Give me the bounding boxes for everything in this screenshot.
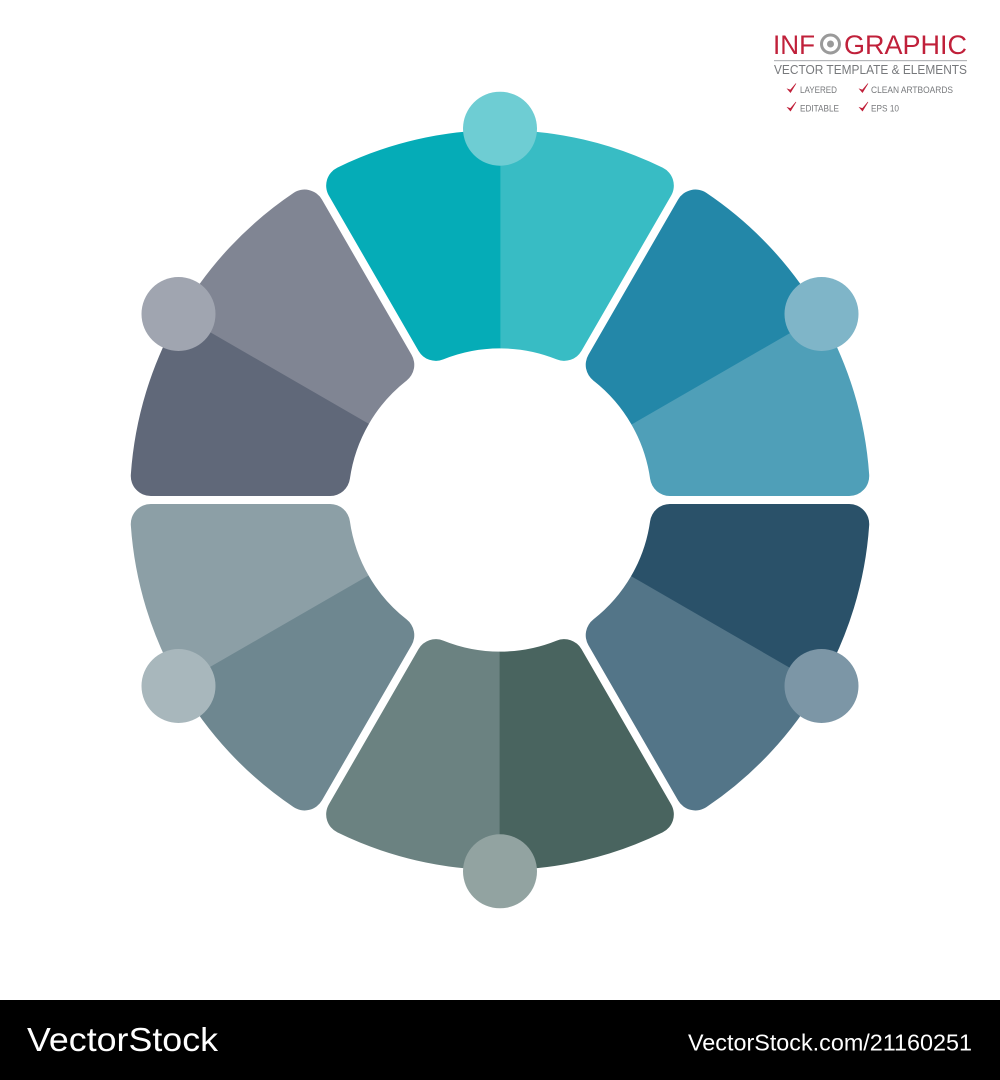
logo subtitle: VECTOR TEMPLATE & ELEMENTS	[774, 62, 967, 77]
node: bottom circle	[463, 834, 537, 908]
check: layered	[788, 84, 837, 96]
node: upper left circle	[142, 277, 216, 351]
check: eps 10: EPS 10	[871, 104, 899, 114]
node: upper right circle	[784, 277, 858, 351]
node: top circle	[463, 92, 537, 166]
checklist	[788, 84, 953, 114]
segment: lower left	[93, 419, 466, 836]
check: eps 10	[860, 102, 899, 114]
logo title	[773, 30, 967, 60]
segment: lower right	[534, 419, 907, 836]
node: lower right circle	[784, 649, 858, 723]
footer bar	[0, 1000, 1000, 1080]
logo title: INF	[773, 30, 815, 60]
check: editable	[788, 102, 839, 114]
ring diagram	[93, 92, 907, 908]
segment: top	[326, 130, 674, 361]
segment: upper left	[93, 164, 466, 581]
segment: upper right	[534, 164, 907, 581]
logo block	[773, 30, 967, 114]
logo ring icon	[822, 35, 840, 53]
check: clean artboards: CLEAN ARTBOARDS	[871, 85, 953, 96]
logo title: GRAPHIC	[844, 30, 967, 60]
segment: bottom	[326, 639, 674, 870]
check: editable: EDITABLE	[800, 104, 839, 114]
footer image id: VectorStock.com/21160251	[688, 1030, 972, 1056]
node: lower left circle	[142, 649, 216, 723]
footer brand: VectorStock	[27, 1022, 218, 1059]
check: layered: LAYERED	[800, 85, 837, 96]
